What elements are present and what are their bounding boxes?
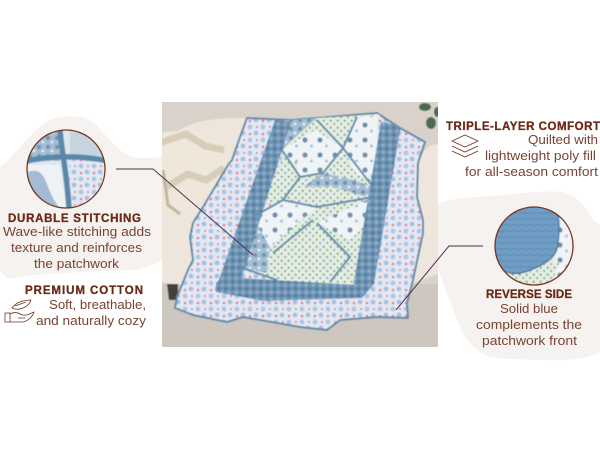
detail circle: stitching <box>26 129 108 210</box>
quilt <box>175 113 425 330</box>
left blue band <box>216 120 291 288</box>
text: durable stitching: Wave-like stitching adds <box>3 224 151 239</box>
bottom blue band <box>216 278 374 301</box>
sofa leg <box>167 284 178 300</box>
icon: hand with leaf <box>5 300 34 322</box>
heading: triple-layer comfort: TRIPLE-LAYER COMFORT <box>446 121 600 133</box>
paisley patches <box>282 118 317 150</box>
leaves <box>419 103 440 129</box>
floor <box>160 284 440 350</box>
text: durable stitching <box>3 224 151 271</box>
wall <box>162 102 438 285</box>
pointer line: reverse side <box>396 246 483 310</box>
background blob: durable stitching <box>0 116 162 278</box>
text: premium cotton: Soft, breathable, <box>49 297 146 312</box>
white floral patches <box>283 130 343 177</box>
text: reverse side <box>476 301 582 348</box>
icon: layers <box>452 135 478 157</box>
text: triple-layer comfort: Quilted with <box>528 132 598 147</box>
pillow <box>160 131 227 214</box>
right blue band <box>353 122 401 287</box>
text: triple-layer comfort: for all-season comfort <box>465 164 598 179</box>
heading: premium cotton: PREMIUM COTTON <box>25 285 143 297</box>
text: reverse side: patchwork front <box>482 333 577 348</box>
background blob: reverse side <box>438 192 600 360</box>
text: premium cotton: and naturally cozy <box>36 313 147 328</box>
text: reverse side: complements the <box>476 317 582 332</box>
heading: durable stitching: DURABLE STITCHING <box>8 213 141 225</box>
text: durable stitching: texture and reinforces <box>11 240 142 255</box>
text: durable stitching: the patchwork <box>34 256 120 271</box>
sofa <box>160 118 440 285</box>
green patches <box>317 117 355 147</box>
patch seams <box>240 117 373 282</box>
detail circle: reverse side <box>492 205 575 287</box>
text: reverse side: Solid blue <box>500 301 558 316</box>
heading: reverse side: REVERSE SIDE <box>486 289 572 301</box>
text: premium cotton <box>36 297 147 328</box>
patchwork centre base <box>262 114 380 288</box>
pointer line: stitching <box>116 169 253 255</box>
text: triple-layer comfort <box>465 132 598 179</box>
text: triple-layer comfort: lightweight poly fill <box>485 148 596 163</box>
product photo: quilt on sofa <box>160 100 440 350</box>
